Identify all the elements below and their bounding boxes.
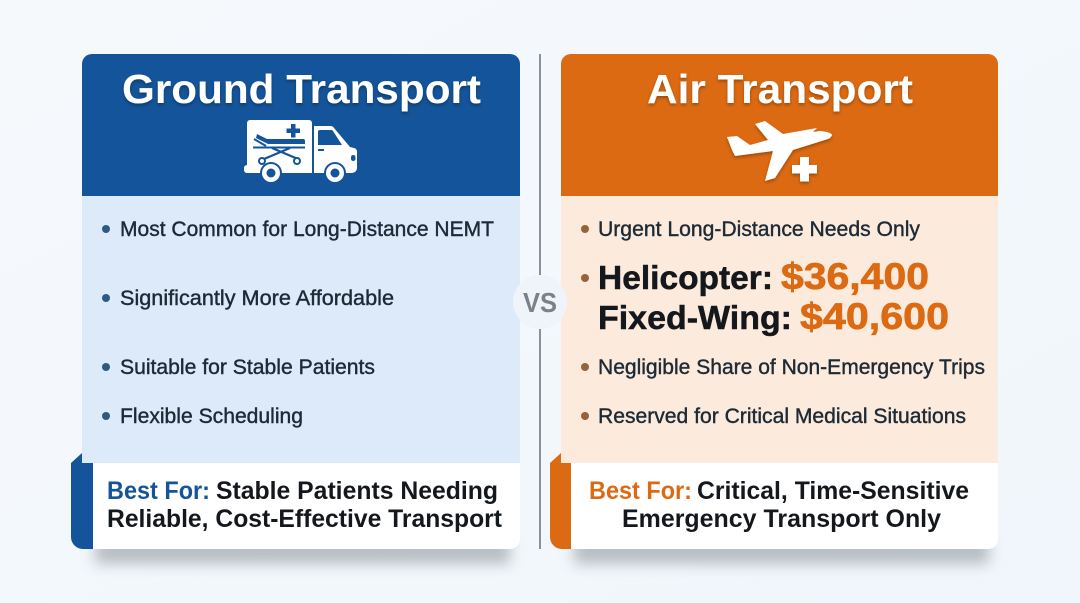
panel body: air (561, 190, 998, 470)
bullet list: air: Reserved for Critical Medical Situations (598, 405, 966, 428)
callout: air best for: Critical, Time-Sensitive (697, 477, 969, 505)
price: fixed-wing: $40,600 (800, 296, 949, 337)
price: helicopter (598, 256, 929, 297)
icon: airplane with plus (727, 121, 832, 182)
callout: ground best for: Reliable, Cost-Effective Transport (107, 505, 503, 533)
icon: ambulance (244, 120, 357, 184)
vs badge: VS (523, 287, 557, 318)
bullet list: ground (102, 218, 494, 428)
callout: air best for: Emergency Transport Only (622, 505, 941, 533)
header: ground (82, 54, 520, 196)
bullet list: air: Urgent Long-Distance Needs Only (598, 218, 920, 241)
callout: air best for (550, 453, 998, 549)
price: fixed-wing (598, 296, 949, 337)
price: helicopter: $36,400 (781, 256, 929, 297)
callout: ground best for: Stable Patients Needing (216, 477, 498, 505)
panel body: ground (82, 190, 520, 470)
panel: ground transport (71, 54, 520, 549)
header: air (561, 54, 998, 196)
bullet list: ground: Most Common for Long-Distance NEMT (120, 218, 494, 241)
bullet list: air: Negligible Share of Non-Emergency Trips (598, 356, 985, 379)
bullet list: ground: Flexible Scheduling (120, 405, 303, 428)
bullet list: ground: Suitable for Stable Patients (120, 356, 375, 379)
panel: air transport (550, 54, 998, 549)
callout: ground best for (71, 453, 520, 549)
callout: ground best for: Best For: (107, 477, 210, 505)
callout: air best for: Best For: (589, 477, 692, 505)
bullet list: ground: Significantly More Affordable (120, 287, 394, 310)
title: air transport: Air Transport (647, 66, 913, 112)
price: helicopter: Helicopter: (598, 259, 773, 296)
vs badge (513, 275, 567, 329)
title: ground transport: Ground Transport (122, 66, 481, 112)
bullet list: air (581, 218, 985, 428)
price: fixed-wing: Fixed-Wing: (598, 299, 792, 336)
